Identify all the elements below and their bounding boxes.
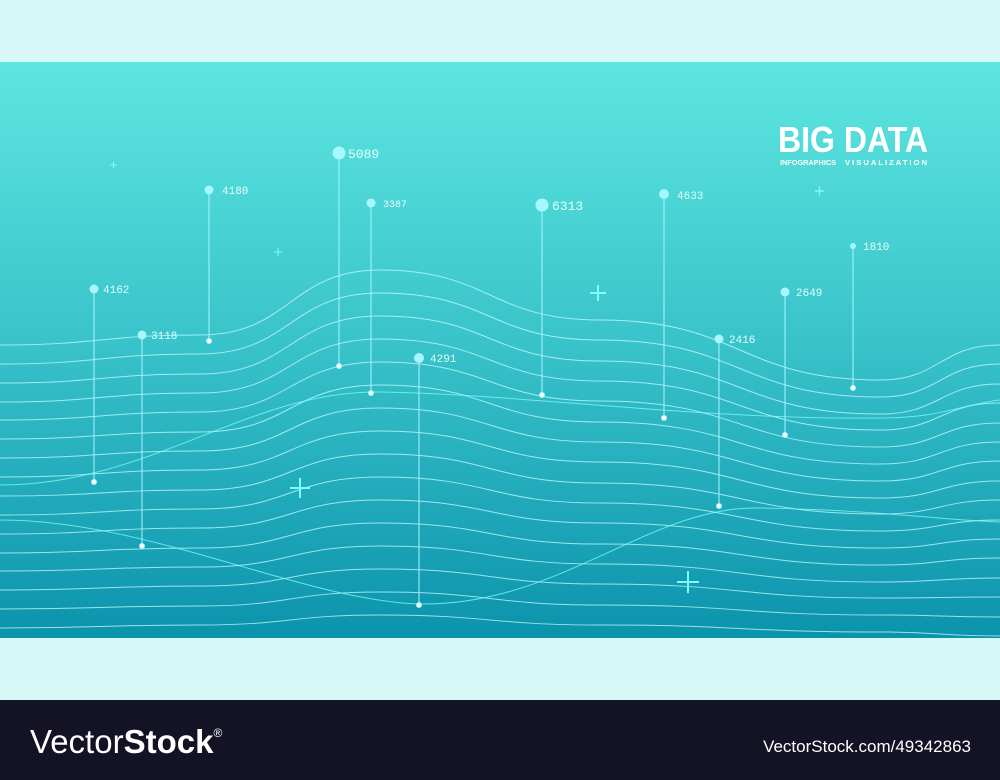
data markers: 6313	[552, 199, 583, 214]
data markers: 5089	[348, 147, 379, 162]
data markers: 2416	[729, 335, 755, 347]
data markers: 4291	[430, 354, 457, 366]
title: INFOGRAPHICS	[780, 158, 836, 167]
footer: VectorStock	[30, 723, 213, 760]
plus signs	[110, 162, 824, 593]
footer: ®	[213, 726, 222, 740]
wave lines	[0, 270, 1000, 636]
data markers: 1810	[863, 242, 889, 254]
data markers: 4180	[222, 186, 248, 198]
data markers: 4162	[103, 285, 129, 297]
data markers: 3118	[151, 331, 177, 343]
data markers: 3387	[383, 200, 407, 211]
title: VISUALIZATION	[845, 158, 929, 167]
footer	[0, 700, 1000, 780]
data markers: 4633	[677, 191, 703, 203]
data markers	[90, 146, 889, 608]
title: BIG DATA	[778, 119, 928, 160]
data markers: 2649	[796, 288, 822, 300]
footer: VectorStock.com/49342863	[763, 737, 971, 756]
